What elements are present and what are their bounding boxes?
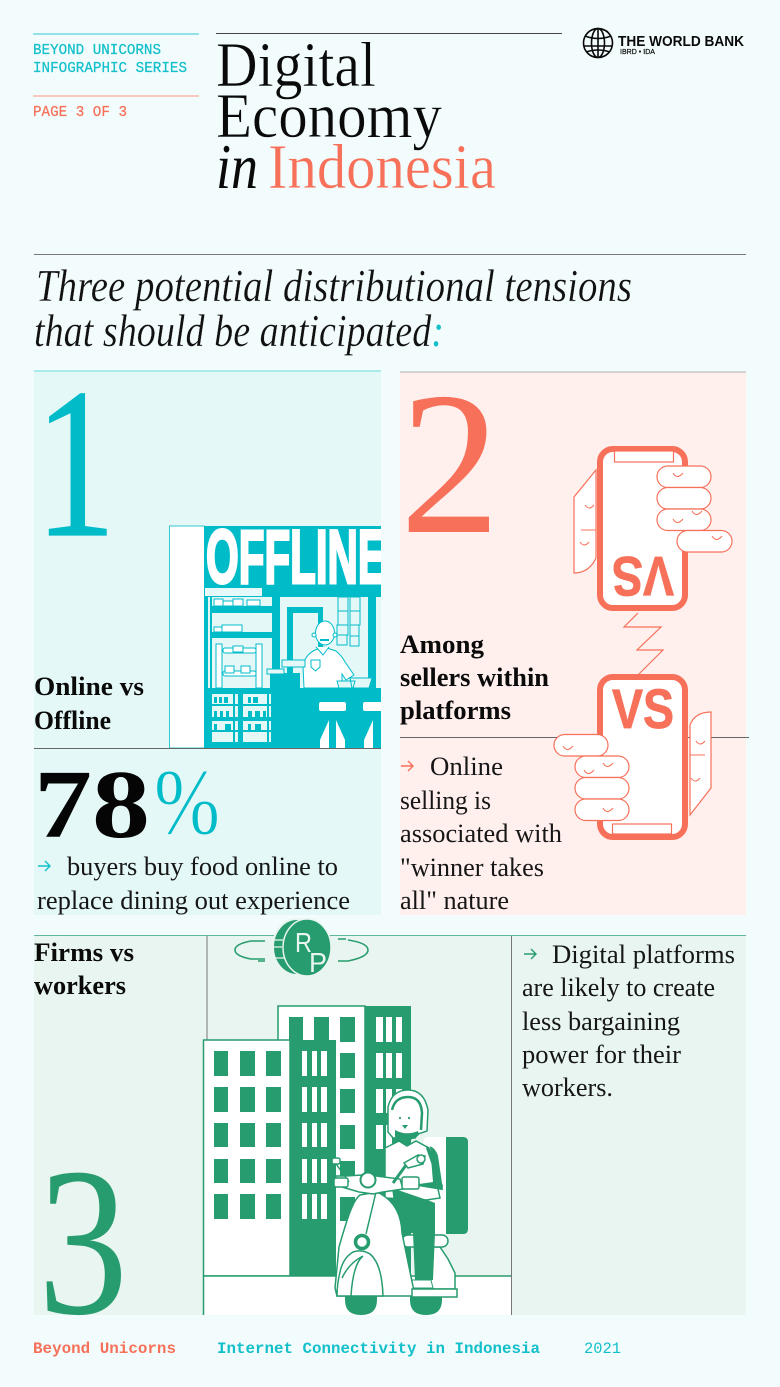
rider torso and legs: [385, 1141, 440, 1200]
illustration: bottom phone: [554, 677, 711, 837]
panel: firms vs workers: [34, 919, 746, 1359]
series label: BEYOND UNICORNS: [33, 42, 161, 59]
handlebar: [332, 1155, 425, 1194]
panel title: sellers within: [400, 662, 549, 692]
illustration: delivery rider on scooter: [332, 1090, 468, 1315]
body text: are likely to create: [522, 972, 715, 1002]
wheels: [345, 1296, 442, 1315]
panel title: [34, 671, 144, 735]
icon: rupiah coin: [235, 919, 368, 978]
body text: workers.: [522, 1072, 613, 1102]
seat and rear body: [402, 1235, 455, 1289]
footer: 2021: [584, 1340, 621, 1358]
street: [204, 1276, 511, 1315]
panel: online vs offline: [34, 345, 390, 915]
panel title: Among: [400, 629, 484, 659]
illustration: bottom phone: VS: [612, 677, 674, 740]
panel title: workers: [34, 970, 126, 1000]
body text: less bargaining: [522, 1006, 680, 1036]
title: Digital: [216, 29, 376, 100]
statistic caption: buyers buy food online to: [67, 851, 338, 881]
panel: among sellers within platforms: [400, 351, 749, 915]
panel title: Online vs: [34, 671, 144, 701]
series label: [33, 34, 199, 77]
statistic caption: replace dining out experience: [37, 885, 350, 915]
heading: Three potential distributional tensions: [36, 260, 632, 311]
number 2: 2: [400, 351, 500, 577]
illustration: offline shop: OFFLINE: [206, 515, 386, 600]
logo: The World Bank: IBRD • IDA: [620, 49, 655, 56]
body text: power for their: [522, 1039, 681, 1069]
number 3: 3: [38, 1124, 128, 1359]
helmet: [388, 1090, 428, 1141]
body text: [522, 939, 735, 1102]
logo: The World Bank: [584, 28, 744, 58]
body text: all" nature: [400, 885, 509, 915]
page number: PAGE 3 OF 3: [33, 104, 127, 121]
footer: Internet Connectivity in Indonesia: [217, 1340, 540, 1358]
series label: INFOGRAPHIC SERIES: [33, 60, 187, 77]
body text: Online: [430, 751, 503, 781]
delivery box: [423, 1137, 468, 1234]
panel title: platforms: [400, 695, 511, 725]
panel title: Firms vs: [34, 937, 134, 967]
panel title: Offline: [34, 705, 111, 735]
body text: Digital platforms: [552, 939, 735, 969]
footer: [33, 1340, 621, 1358]
illustration: top phone: [574, 449, 732, 608]
panel title: [34, 937, 134, 1000]
title: Economy: [216, 80, 442, 151]
statistic: 78 percent: 78: [34, 751, 150, 859]
scooter body: [335, 1192, 457, 1297]
body text: associated with: [400, 818, 562, 848]
zigzag connector: [624, 613, 663, 674]
statistic caption: [37, 851, 350, 915]
illustration: offline shop: [170, 515, 390, 748]
footer: Beyond Unicorns: [33, 1340, 176, 1358]
logo: The World Bank: THE WORLD BANK: [618, 34, 744, 50]
body text: selling is: [400, 785, 491, 815]
icon: rupiah coin: R: [295, 927, 312, 958]
statistic: 78 percent: %: [154, 751, 220, 855]
number 1: 1: [35, 345, 116, 582]
statistic: 78 percent: [34, 751, 220, 859]
illustration: top phone: VS: [612, 545, 674, 608]
body text: [400, 751, 562, 915]
heading: that should be anticipated:: [34, 305, 444, 356]
title: Indonesia: [268, 131, 496, 202]
shopkeeper: [303, 621, 354, 688]
body text: "winner takes: [400, 852, 544, 882]
illustration: office buildings: [204, 1006, 411, 1276]
title: [216, 29, 562, 202]
heading: [34, 260, 632, 356]
panel title: [400, 629, 549, 725]
title: in: [216, 131, 258, 202]
icon: rupiah coin: P: [309, 947, 327, 978]
